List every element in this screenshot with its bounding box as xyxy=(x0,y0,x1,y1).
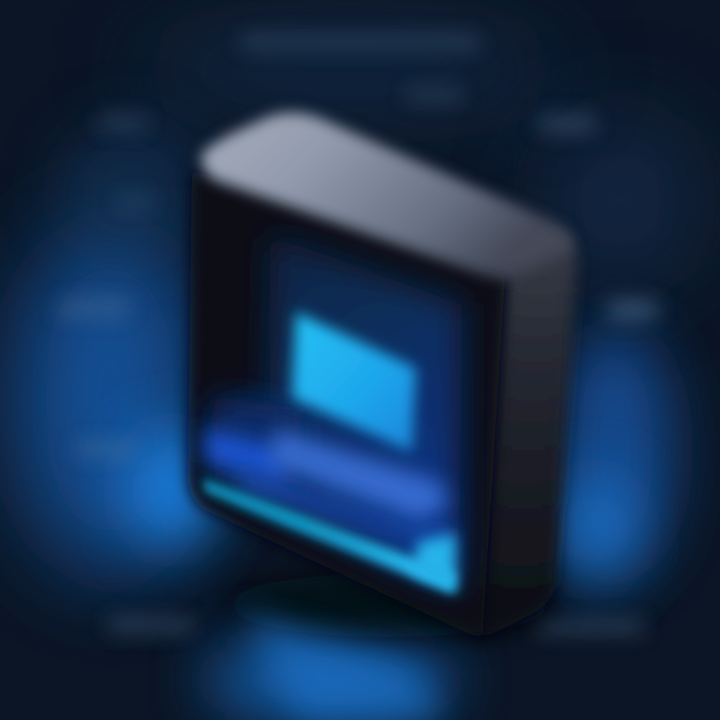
device: top face xyxy=(202,112,572,278)
label: top centre xyxy=(405,88,463,102)
screen: stacked layer xyxy=(270,428,448,520)
screen: bright panel xyxy=(292,312,416,452)
label: upper left xyxy=(98,116,148,130)
label: bottom right xyxy=(535,620,645,634)
screen: lower left tint xyxy=(208,395,300,490)
device xyxy=(188,112,576,640)
label: upper right xyxy=(538,116,596,132)
device: front frame xyxy=(188,170,505,640)
label: top heading xyxy=(240,34,480,50)
label: bottom left xyxy=(108,618,193,632)
label: right middle xyxy=(608,302,658,318)
device shadow xyxy=(225,573,555,637)
label: left middle xyxy=(58,300,130,316)
screen: blue glow left xyxy=(204,428,290,485)
label: left upper middle xyxy=(115,196,155,208)
screen: cyan strip xyxy=(202,478,455,594)
floor reflection xyxy=(240,610,445,720)
screen: lower stacked layer xyxy=(240,468,450,548)
screen: bright corner xyxy=(412,534,456,590)
blurred labels around the device xyxy=(58,34,658,634)
device: screen xyxy=(215,235,462,590)
device: right side xyxy=(480,232,576,640)
label: left lower xyxy=(75,442,135,456)
